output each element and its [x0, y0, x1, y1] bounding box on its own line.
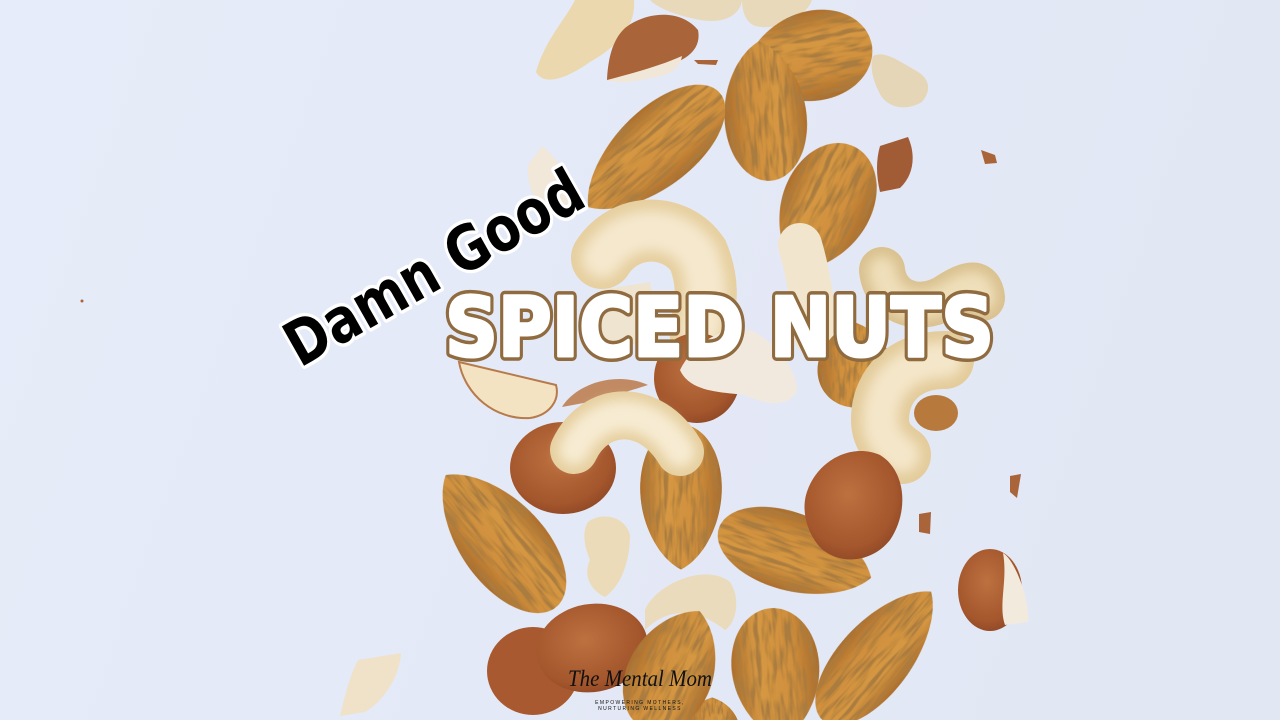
cashew fragment [584, 516, 630, 597]
cashew piece top left [536, 0, 634, 80]
white hazelnut [680, 329, 797, 403]
almond large upper left [563, 63, 745, 237]
logo: The Mental Mom: EMPOWERING MOTHERS, [595, 700, 685, 706]
almond bottom centre [606, 593, 738, 720]
cashew shard bottom left [340, 653, 401, 716]
small shell behind almond [528, 146, 582, 216]
hazelnut left [510, 422, 616, 514]
small fragments [80, 60, 1021, 534]
almond top centre [718, 38, 812, 184]
hull piece left [459, 362, 557, 418]
shell centre [600, 282, 660, 350]
heading: Spiced Nuts: SPICED NUTS [445, 281, 994, 376]
cut hazelnut top [607, 15, 699, 82]
almond centre lower [640, 424, 722, 570]
top shell pieces [650, 0, 812, 27]
cashew right small [800, 245, 816, 335]
logo: The Mental Mom: NURTURING WELLNESS [598, 706, 682, 712]
logo: The Mental Mom: The Mental Mom [568, 666, 712, 691]
almond bottom right [795, 569, 959, 720]
cashew right top [882, 270, 982, 305]
shell lower centre [645, 574, 736, 630]
cashew large centre [602, 231, 706, 330]
almond partial behind right cashews [818, 322, 892, 408]
broken hazelnut right [958, 549, 1028, 631]
shell piece top right [872, 54, 928, 107]
hazelnut centre [654, 333, 740, 423]
almond tip lower right [914, 395, 958, 431]
hazelnut bottom [529, 595, 655, 701]
almond lower centre [707, 491, 883, 615]
hazel fragment [877, 137, 913, 192]
cashew centre [574, 415, 680, 452]
almond back top [735, 0, 881, 115]
heading: Damn Good: Damn Good [271, 154, 596, 381]
heading: Spiced Nuts: SPICED NUTS [445, 281, 994, 376]
cashew right lower [880, 360, 945, 455]
almond lower left [414, 448, 588, 634]
hazelnut right [804, 451, 902, 559]
logo: The Mental Mom [568, 666, 712, 712]
almond bottom [727, 604, 825, 720]
almond bottom tip [685, 698, 739, 720]
hazel shell small [562, 379, 648, 407]
almond right [755, 127, 895, 289]
hazelnut bottom back [487, 627, 579, 715]
nuts photo collage [80, 0, 1028, 720]
